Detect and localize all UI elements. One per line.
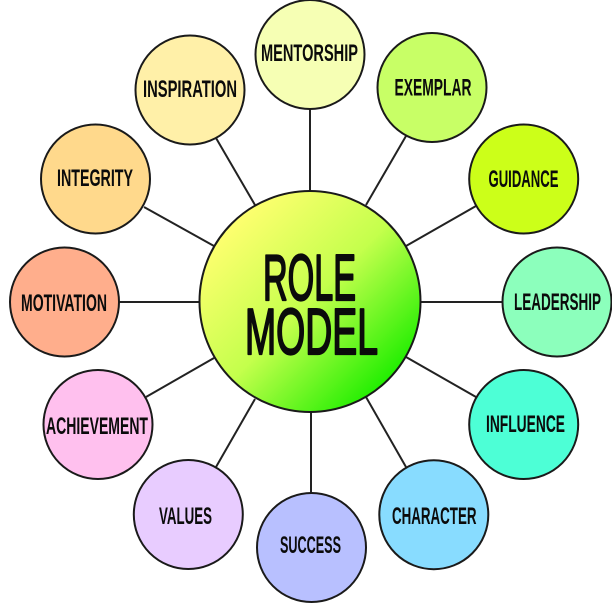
topic: Exemplar [378, 33, 486, 142]
topic: Mentorship [256, 0, 364, 109]
topic: Guidance [469, 124, 578, 234]
topic: Motivation: MOTIVATION [21, 290, 107, 317]
central hub: Role Model: ROLE [263, 241, 356, 314]
topic: Motivation [10, 248, 119, 356]
topic: Achievement: ACHIEVEMENT [46, 413, 148, 440]
topic: Integrity: INTEGRITY [57, 165, 133, 192]
topic: Character: CHARACTER [392, 503, 476, 530]
central hub: Role Model: MODEL [245, 295, 378, 368]
topic: Inspiration: INSPIRATION [143, 76, 237, 103]
topic: Values: VALUES [159, 503, 212, 530]
topic: Leadership [502, 248, 612, 356]
topic: Success [257, 493, 366, 602]
central hub: Role Model [200, 191, 420, 412]
topic: Mentorship: MENTORSHIP [261, 40, 358, 67]
topic: Integrity [41, 124, 150, 234]
topic: Values [134, 460, 243, 569]
topic: Inspiration [136, 36, 244, 144]
topic: Influence [469, 370, 578, 479]
topic: Success: SUCCESS [280, 532, 341, 559]
connector lines from hub to topic circles [119, 109, 502, 493]
topic: Exemplar: EXEMPLAR [394, 74, 472, 102]
topic: Achievement [44, 370, 152, 479]
topic: Character [379, 460, 488, 569]
